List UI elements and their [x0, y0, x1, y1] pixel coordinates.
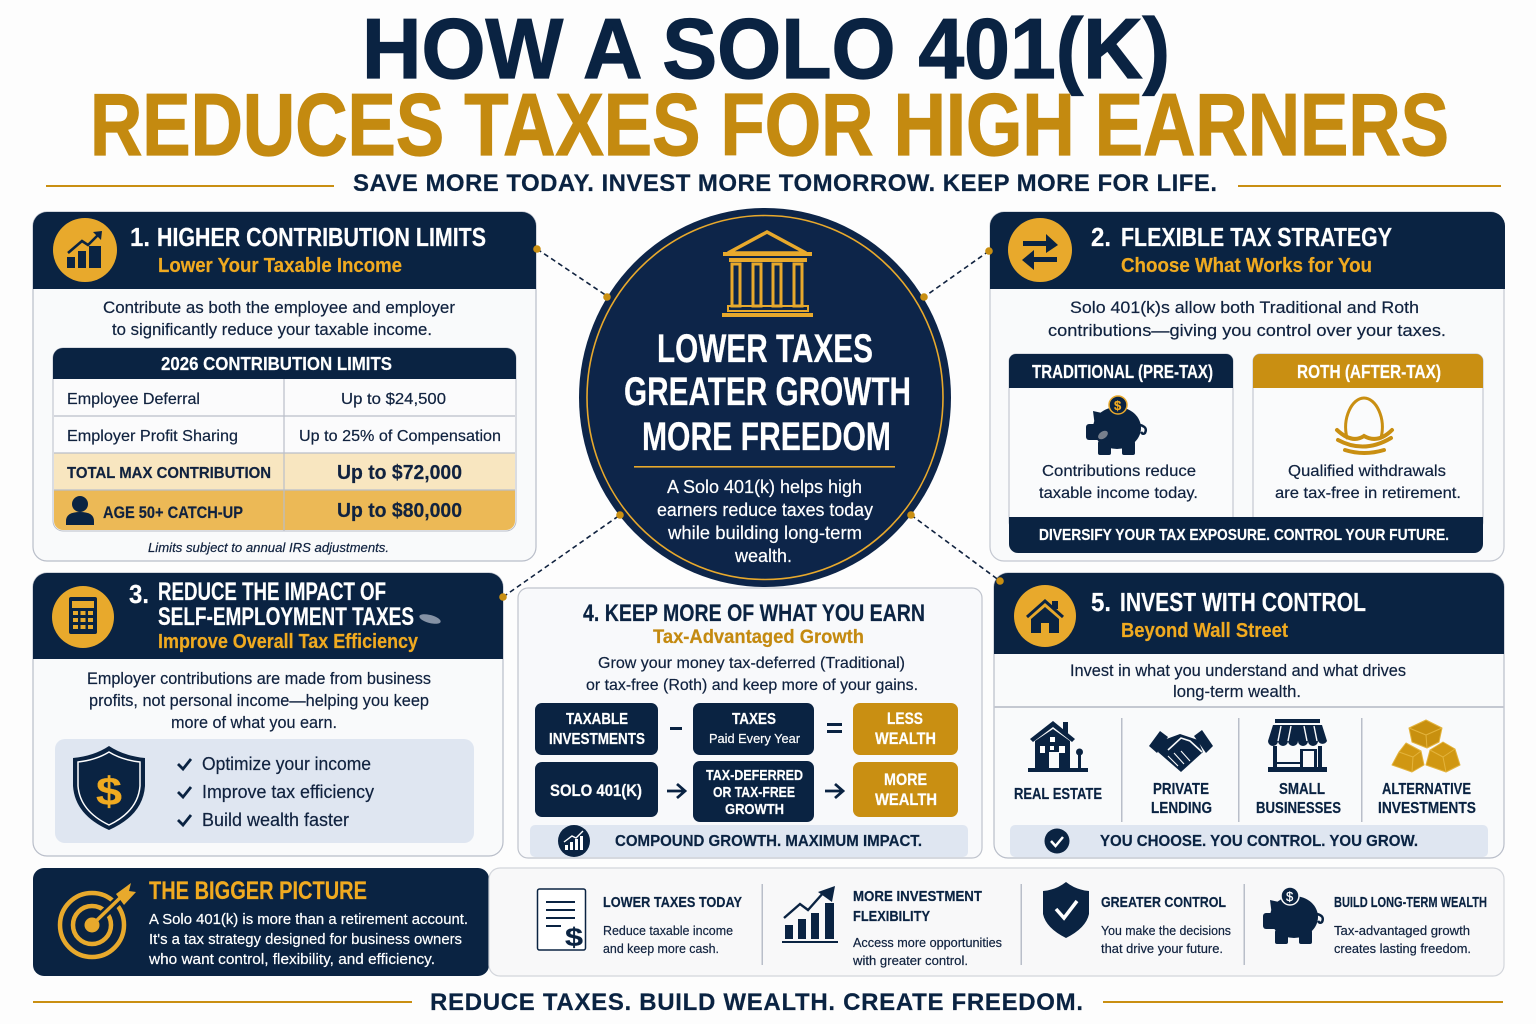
card: traditional pre-tax: Contributions reduce: [1042, 463, 1196, 480]
arrow: [825, 784, 843, 798]
panel 1 description: to significantly reduce your taxable income.: [112, 320, 432, 339]
bigger picture description: It's a tax strategy designed for business owners: [149, 931, 462, 948]
icon: growth chart: [558, 825, 590, 857]
icon: storefront: [1268, 719, 1327, 772]
panel 2 header: FLEXIBLE TAX STRATEGY: [1121, 222, 1392, 252]
benefit: greater control: that drive your future.: [1101, 941, 1223, 956]
icon: growth chart: [782, 886, 838, 943]
panel 4 description: Grow your money tax-deferred (Traditional): [598, 655, 905, 672]
row: age 50+ catch-up: Up to $80,000: [337, 500, 462, 522]
badge description: earners reduce taxes today: [657, 500, 873, 520]
banner: you choose: [1010, 825, 1488, 857]
panel 4 description: or tax-free (Roth) and keep more of your gains.: [586, 677, 918, 694]
equation: solo 401k: MORE: [884, 770, 927, 789]
panel: 2 flexible tax strategy: [990, 212, 1505, 561]
row: total max contribution: TOTAL MAX CONTRIBUTION: [67, 465, 271, 482]
item: small businesses: [1256, 719, 1341, 817]
item: small businesses: SMALL: [1279, 781, 1325, 798]
badge headline: MORE FREEDOM: [642, 415, 891, 459]
benefit: build long-term wealth: creates lasting freedom.: [1334, 941, 1471, 956]
equation: solo 401k: OR TAX-FREE: [713, 784, 795, 801]
panel 2 description: contributions—giving you control over your taxes.: [1048, 321, 1446, 340]
item: alternative investments: [1378, 720, 1476, 817]
banner: compound growth: COMPOUND GROWTH. MAXIMUM IMPACT.: [615, 833, 922, 850]
panel 1 header: HIGHER CONTRIBUTION LIMITS: [157, 222, 486, 252]
panel 3 header: 3.: [129, 579, 149, 609]
icon: shield with dollar: [73, 746, 145, 830]
row: employee deferral: Up to $24,500: [341, 391, 446, 408]
row: total max contribution: Up to $72,000: [337, 462, 462, 484]
panel: the bigger picture: [33, 868, 489, 976]
card: roth after-tax: [1253, 354, 1483, 529]
panel 4 heading: [583, 600, 925, 648]
panel 5 header: [994, 573, 1504, 654]
panel 5 header: Beyond Wall Street: [1121, 620, 1288, 642]
bigger picture description: A Solo 401(k) is more than a retirement account.: [149, 911, 468, 928]
icon: rising bar chart: [53, 218, 117, 282]
panel: the bigger picture: THE BIGGER PICTURE: [149, 877, 367, 905]
benefit: lower taxes today: [538, 889, 742, 956]
benefit: build long-term wealth: Tax-advantaged growth: [1334, 923, 1470, 938]
banner: you choose: YOU CHOOSE. YOU CONTROL. YOU GROW.: [1100, 833, 1418, 850]
panel 3 header: [33, 573, 503, 659]
banner: compound growth: [530, 825, 968, 857]
banner: diversify: [1009, 517, 1483, 553]
panel 5 description: Invest in what you understand and what drives: [1070, 661, 1406, 680]
equation: solo 401k: WEALTH: [875, 790, 937, 809]
panel 5 description: [1070, 661, 1406, 701]
bigger picture description: who want control, flexibility, and efficiency.: [148, 951, 435, 968]
badge headline: [624, 327, 911, 459]
banner: diversify: DIVERSIFY YOUR TAX EXPOSURE. CONTROL YOUR FUTURE.: [1039, 527, 1449, 544]
title: [90, 2, 1449, 174]
icon: check circle: [1044, 828, 1070, 854]
panel 5 description: long-term wealth.: [1173, 682, 1301, 701]
row: age 50+ catch-up: [66, 496, 462, 525]
arrow: [667, 784, 685, 798]
row: employer profit sharing: Up to 25% of Compensation: [299, 428, 501, 445]
panel 5 header: 5.: [1091, 587, 1111, 617]
connector lines: [499, 245, 1004, 601]
row: employee deferral: Employee Deferral: [67, 391, 200, 408]
benefit: greater control: [1043, 882, 1231, 956]
row: employer profit sharing: [67, 428, 501, 445]
item: alternative investments: ALTERNATIVE: [1382, 781, 1471, 798]
card: roth after-tax: Qualified withdrawals: [1288, 463, 1446, 480]
panel 2 header: [990, 212, 1505, 289]
benefit: build long-term wealth: [1263, 887, 1487, 956]
panel 1 header: Lower Your Taxable Income: [158, 255, 402, 277]
panel 2 header: 2.: [1091, 222, 1111, 252]
equation: taxable investments: Paid Every Year: [709, 731, 801, 746]
panel 1 header: [33, 212, 536, 289]
icon: shield with check: [1043, 882, 1089, 938]
benefit: more investment flexibility: MORE INVESTMENT: [853, 888, 982, 905]
panel 2 description: Solo 401(k)s allow both Traditional and Roth: [1070, 298, 1419, 317]
benefit: greater control: GREATER CONTROL: [1101, 894, 1226, 911]
benefit: lower taxes today: and keep more cash.: [603, 941, 719, 956]
title: HOW A SOLO 401(K): [362, 2, 1170, 97]
panel 4 description: [586, 655, 918, 694]
footer tagline: REDUCE TAXES. BUILD WEALTH. CREATE FREEDOM.: [430, 989, 1083, 1016]
card: traditional pre-tax: taxable income today.: [1039, 485, 1198, 502]
center badge: [579, 208, 951, 587]
item: alternative investments: INVESTMENTS: [1378, 800, 1476, 817]
equation: taxable investments: INVESTMENTS: [549, 731, 645, 748]
icon: piggy bank: $: [1114, 398, 1122, 413]
card: roth after-tax: are tax-free in retirement.: [1275, 485, 1461, 502]
equation: solo 401k: TAX-DEFERRED: [706, 767, 803, 784]
row: employer profit sharing: Employer Profit Sharing: [67, 428, 238, 445]
card: roth after-tax: ROTH (AFTER-TAX): [1297, 362, 1441, 382]
row: age 50+ catch-up: AGE 50+ CATCH-UP: [103, 503, 243, 522]
checklist items: Improve tax efficiency: [202, 782, 374, 802]
icon: tax document: $: [565, 922, 584, 952]
card: traditional pre-tax: TRADITIONAL (PRE-TAX): [1032, 362, 1213, 382]
footnote: Limits subject to annual IRS adjustments.: [148, 540, 389, 555]
checklist items: [178, 754, 374, 830]
panel: 1 higher contribution limits: [33, 212, 536, 561]
icon: house and tree: [1028, 721, 1088, 772]
icon: tax document: [538, 889, 586, 952]
panel: benefits strip: [489, 868, 1504, 976]
benefit: more investment flexibility: Access more opportunities: [853, 935, 1002, 950]
checklist box: [55, 739, 474, 843]
panel 2 header: Choose What Works for You: [1121, 255, 1372, 277]
panel 4 heading: 4. KEEP MORE OF WHAT YOU EARN: [583, 600, 925, 627]
panel 3 description: profits, not personal income—helping you keep: [89, 691, 429, 710]
benefit: more investment flexibility: FLEXIBILITY: [853, 908, 930, 925]
icon: shield with dollar: $: [96, 770, 122, 814]
icon: calculator: [52, 586, 114, 648]
icon: piggy bank: [1086, 396, 1146, 455]
icon: bank building: [722, 232, 813, 317]
benefit: greater control: You make the decisions: [1101, 923, 1231, 938]
checklist items: Build wealth faster: [202, 810, 349, 830]
panel 3 description: more of what you earn.: [171, 713, 337, 732]
panel 3 description: [87, 669, 431, 732]
badge description: wealth.: [734, 546, 792, 566]
icon: target with arrow: [60, 883, 136, 957]
panel 3 header: REDUCE THE IMPACT OF: [158, 578, 386, 606]
panel: 4 keep more of what you earn: [518, 588, 982, 858]
icon: handshake: [1149, 730, 1213, 772]
tagline: SAVE MORE TODAY. INVEST MORE TOMORROW. KEEP MORE FOR LIFE.: [353, 170, 1217, 197]
panel 2 description: [1048, 298, 1446, 340]
badge description: [657, 477, 873, 566]
equation: taxable investments: WEALTH: [875, 729, 936, 748]
item: real estate: [1014, 721, 1102, 803]
panel 3 header: SELF-EMPLOYMENT TAXES: [158, 603, 414, 631]
equation: solo 401k: GROWTH: [725, 801, 784, 818]
icon: swap arrows: [1008, 218, 1072, 282]
icon: nest egg: [1337, 398, 1392, 453]
icon: person: [66, 496, 94, 525]
icon: gold bars: [1392, 720, 1460, 772]
badge headline: LOWER TAXES: [657, 327, 873, 371]
icon: piggy bank with coin: $: [1286, 889, 1294, 904]
benefit: build long-term wealth: BUILD LONG-TERM WEALTH: [1334, 894, 1487, 911]
panel 1 description: Contribute as both the employee and employer: [103, 298, 455, 317]
item: private lending: [1149, 730, 1213, 817]
equation: taxable investments: LESS: [887, 709, 923, 728]
icon: piggy bank with coin: [1263, 887, 1323, 944]
item: real estate: REAL ESTATE: [1014, 786, 1102, 803]
checklist items: Optimize your income: [202, 754, 371, 774]
item: small businesses: BUSINESSES: [1256, 800, 1341, 817]
panel 1 description: [103, 298, 455, 339]
badge headline: GREATER GROWTH: [624, 370, 911, 414]
benefit: lower taxes today: Reduce taxable income: [603, 923, 733, 938]
equation: solo 401k: SOLO 401(K): [550, 781, 642, 800]
benefit: lower taxes today: LOWER TAXES TODAY: [603, 894, 742, 911]
panel 5 header: INVEST WITH CONTROL: [1120, 587, 1366, 617]
table: 2026 contribution limits: [53, 348, 516, 531]
icon: house: [1014, 585, 1076, 647]
panel 1 header: 1.: [130, 222, 150, 252]
panel: 3 reduce self-employment taxes: [33, 573, 503, 856]
equation: taxable investments: TAXABLE: [566, 711, 628, 728]
panel 3 description: Employer contributions are made from business: [87, 669, 431, 688]
equation: taxable investments: [535, 703, 958, 755]
equation: taxable investments: TAXES: [732, 711, 776, 728]
benefit: more investment flexibility: [782, 886, 1002, 968]
badge description: while building long-term: [667, 523, 862, 543]
panel 3 header: Improve Overall Tax Efficiency: [158, 631, 419, 653]
table: 2026 contribution limits: 2026 CONTRIBUTION LIMITS: [161, 354, 392, 374]
item: private lending: LENDING: [1151, 800, 1212, 817]
benefit: more investment flexibility: with greater control.: [852, 953, 968, 968]
badge description: A Solo 401(k) helps high: [667, 477, 862, 497]
item: private lending: PRIVATE: [1153, 781, 1209, 798]
row: employee deferral: [67, 391, 446, 408]
card: traditional pre-tax: [1009, 354, 1233, 529]
equation: solo 401k: [535, 761, 958, 822]
panel: 5 invest with control: [994, 573, 1504, 858]
panel 4 heading: Tax-Advantaged Growth: [653, 627, 864, 648]
row: total max contribution: [67, 462, 462, 484]
bigger picture description: [148, 911, 468, 968]
